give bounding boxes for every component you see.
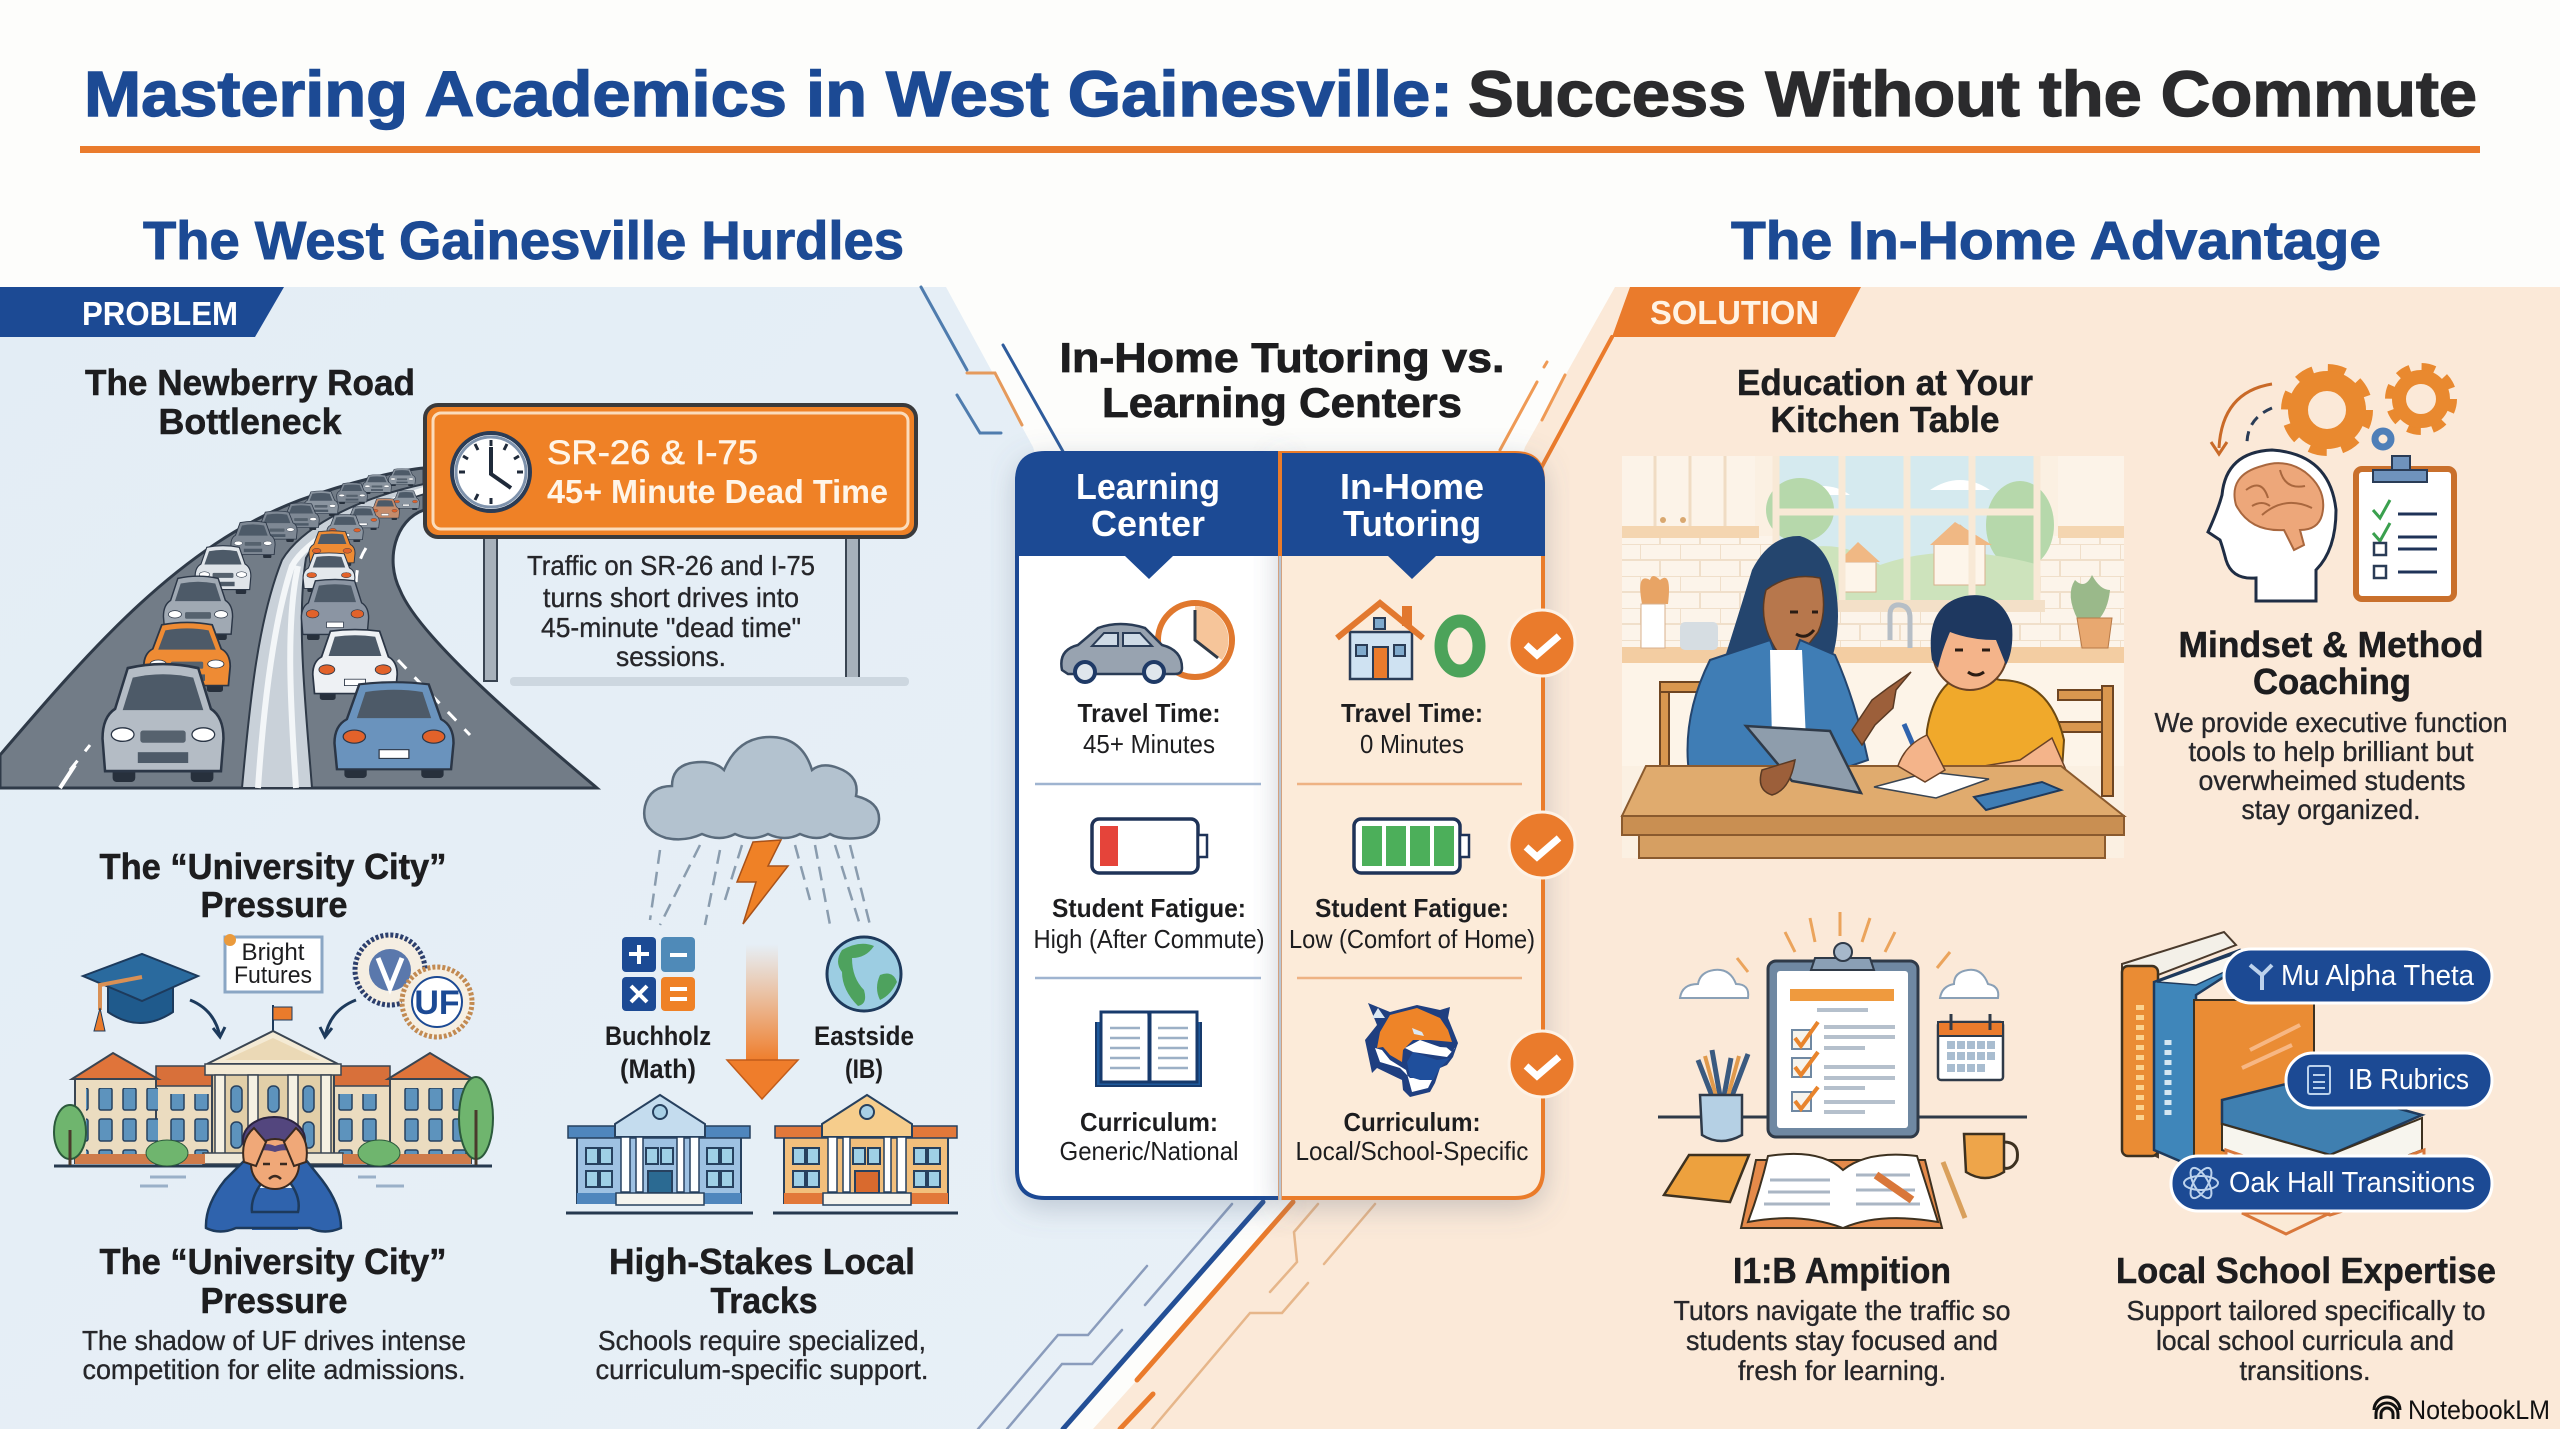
heading: university city pressure top: Pressure [200, 884, 348, 925]
heading: high-stakes local tracks: High-Stakes Local [609, 1241, 915, 1282]
column header: learning center: Learning [1076, 466, 1220, 507]
row: travel time, in-home [1341, 698, 1483, 759]
tag: problem: PROBLEM [82, 295, 238, 332]
panel: solution [1093, 287, 2560, 1429]
icon: car and clock [1061, 603, 1232, 682]
illustration: blue school [566, 1095, 753, 1213]
title rule [80, 146, 2480, 153]
section heading: advantage: The In-Home Advantage [1731, 211, 2381, 271]
pill: oak hall transitions: Oak Hall Transitions [2229, 1167, 2475, 1199]
icon: check 3 [1509, 1031, 1575, 1097]
tag: solution: SOLUTION [1650, 294, 1819, 331]
illustration: desk with clipboard and open book [1658, 912, 2027, 1228]
calendar [1938, 1014, 2003, 1080]
heading: high-stakes local tracks: Tracks [710, 1280, 818, 1321]
icon: check 2 [1509, 812, 1575, 878]
heading: kitchen table: Kitchen Table [1770, 399, 2000, 440]
mug [1964, 1134, 2017, 1178]
heading: university city pressure top: The “University City” [100, 846, 446, 887]
text: mindset description: tools to help brilliant but [2188, 736, 2474, 767]
illustration: university building [54, 1005, 493, 1186]
center heading: comparison: Learning Centers [1102, 379, 1462, 426]
pill: ib rubrics: IB Rubrics [2348, 1064, 2469, 1096]
label: buchholz: Buchholz [605, 1021, 711, 1051]
text: local school description [2126, 1295, 2486, 1386]
icon: gears, brain and checklist [2208, 368, 2454, 601]
heading: local school expertise: Local School Expertise [2116, 1250, 2496, 1291]
chairs [1660, 682, 2113, 796]
tutor [1688, 536, 1911, 785]
row: fatigue, in-home: Student Fatigue: [1315, 893, 1509, 923]
icon: open book [1096, 1012, 1201, 1086]
text: local school description: Support tailored specifically to [2126, 1295, 2486, 1326]
text: ambition description: fresh for learning. [1738, 1355, 1946, 1386]
illustration: stack of books [2122, 932, 2492, 1234]
text: traffic description: turns short drives into [543, 582, 799, 613]
pencil cup [1698, 1050, 1748, 1141]
comparison table [1015, 453, 1575, 1200]
heading: high-stakes local tracks [609, 1241, 915, 1321]
sign: dead time [425, 405, 916, 686]
text: ambition description: Tutors navigate the traffic so [1674, 1295, 2010, 1326]
label: buchholz: (Math) [620, 1054, 696, 1084]
heading: mindset and method: Mindset & Method [2178, 624, 2484, 665]
text: university city description: competition for elite admissions. [82, 1354, 466, 1385]
heading: mindset and method: Coaching [2253, 661, 2411, 702]
row: fatigue, learning center: High (After Commute) [1034, 924, 1264, 954]
text: traffic description: 45-minute "dead time" [541, 612, 801, 643]
panel: problem [0, 287, 1263, 1429]
title: Mastering Academics in West Gainesville: [84, 58, 1453, 130]
text: university city description: The shadow of UF drives intense [82, 1325, 466, 1356]
sign: dead time: SR-26 & I-75 [547, 434, 758, 472]
icon: falling arrow [727, 944, 798, 1099]
row: curriculum, learning center [1060, 1107, 1238, 1166]
heading: kitchen table: Education at Your [1737, 362, 2033, 403]
heading: university city pressure top [100, 846, 446, 925]
label: buchholz [605, 1021, 711, 1084]
text: mindset description [2154, 707, 2508, 825]
title: Success Without the Commute [1468, 58, 2477, 130]
illustration: orange school [773, 1095, 958, 1213]
heading: ambition: I1:B Ampition [1733, 1250, 1951, 1291]
row: travel time, in-home: Travel Time: [1341, 698, 1483, 728]
text: traffic description: sessions. [616, 641, 726, 672]
icon: full battery [1354, 819, 1469, 873]
text: ambition description: students stay focused and [1686, 1325, 1998, 1356]
center heading: comparison: In-Home Tutoring vs. [1060, 334, 1504, 381]
text: ambition description [1674, 1295, 2010, 1386]
icon: check 1 [1509, 610, 1575, 676]
large gear [2287, 370, 2367, 450]
icon: university seals: UF [414, 984, 460, 1022]
text: mindset description: overwheimed students [2198, 765, 2466, 796]
row: curriculum, learning center: Generic/National [1060, 1136, 1238, 1166]
title [84, 58, 2477, 130]
row: travel time, learning center: Travel Time: [1078, 698, 1220, 728]
open book [1741, 1154, 1965, 1228]
heading: kitchen table [1737, 362, 2033, 440]
icon: storm cloud [644, 737, 879, 925]
pill: mu alpha theta: Mu Alpha Theta [2281, 960, 2475, 992]
text: local tracks description: curriculum-specific support. [596, 1354, 928, 1385]
heading: university city pressure bottom [100, 1241, 446, 1321]
tabletop [1622, 766, 2124, 858]
heading: mindset and method [2178, 624, 2484, 702]
row: curriculum, in-home: Local/School-Specific [1296, 1136, 1528, 1166]
row: fatigue, in-home [1289, 893, 1535, 954]
row: fatigue, learning center [1034, 893, 1264, 954]
icon: university seals [355, 935, 472, 1037]
text: mindset description: stay organized. [2242, 794, 2420, 825]
heading: newberry road: Bottleneck [158, 401, 342, 442]
label: eastside: (IB) [845, 1054, 883, 1084]
illustration: kitchen table tutoring [1622, 456, 2124, 858]
row: travel time, learning center: 45+ Minutes [1083, 729, 1215, 759]
sign: dead time: 45+ Minute Dead Time [547, 473, 888, 510]
tag: problem [0, 287, 284, 337]
pill: ib rubrics [2286, 1053, 2492, 1108]
row: fatigue, in-home: Low (Comfort of Home) [1289, 924, 1535, 954]
note: bright futures [224, 934, 322, 992]
heading: newberry road: The Newberry Road [85, 362, 415, 403]
heading: university city pressure bottom: Pressure [200, 1280, 348, 1321]
note: bright futures: Bright [242, 939, 305, 966]
text: university city description [82, 1325, 466, 1385]
row: curriculum, in-home [1296, 1107, 1528, 1166]
icon: tiger mascot [1365, 1003, 1458, 1097]
row: fatigue, learning center: Student Fatigue: [1052, 893, 1246, 923]
pill: mu alpha theta [2224, 949, 2492, 1003]
tag: solution [1612, 287, 1861, 337]
row: curriculum, in-home: Curriculum: [1344, 1107, 1480, 1137]
illustration: stressed student [206, 1117, 341, 1232]
column header: in-home tutoring: Tutoring [1343, 503, 1481, 544]
text: local tracks description [596, 1325, 928, 1385]
note: bright futures: Futures [234, 962, 312, 989]
circuit accents: center top [921, 287, 1612, 470]
column header: in-home tutoring: In-Home [1340, 466, 1484, 507]
text: local tracks description: Schools require specialized, [598, 1325, 926, 1356]
icon: graduation cap [83, 954, 198, 1031]
column header: learning center [1015, 453, 1280, 579]
section heading: hurdles: The West Gainesville Hurdles [143, 211, 904, 271]
icon: math tiles [622, 937, 695, 1011]
icon: globe [827, 937, 901, 1011]
column header: in-home tutoring [1282, 453, 1545, 579]
heading: newberry road [85, 362, 415, 442]
text: mindset description: We provide executive function [2154, 707, 2508, 738]
row: travel time, in-home: 0 Minutes [1360, 729, 1464, 759]
text: local school description: local school curricula and [2156, 1325, 2454, 1356]
icon: low battery [1092, 819, 1207, 873]
row: travel time, learning center [1078, 698, 1220, 759]
circuit accents: center bottom [978, 1202, 1375, 1429]
arrows into university [190, 1000, 356, 1037]
text: traffic description [527, 550, 815, 672]
icon: clock [452, 433, 530, 511]
label: eastside: Eastside [814, 1021, 914, 1051]
icon: house and zero [1337, 603, 1479, 679]
label: eastside [814, 1021, 914, 1084]
column header: learning center: Center [1091, 503, 1205, 544]
illustration: congested highway [0, 468, 597, 788]
center heading: comparison [1060, 334, 1504, 426]
pill: oak hall transitions [2171, 1156, 2492, 1211]
heading: university city pressure bottom: The “University City” [100, 1241, 446, 1282]
text: traffic description: Traffic on SR-26 and I-75 [527, 550, 815, 581]
student [1925, 595, 2066, 790]
text: local school description: transitions. [2240, 1355, 2370, 1386]
cloud left [1680, 970, 1748, 998]
notebook [1664, 1155, 1749, 1202]
logo: notebooklm: NotebookLM [2408, 1395, 2550, 1425]
row: curriculum, learning center: Curriculum: [1080, 1107, 1218, 1137]
